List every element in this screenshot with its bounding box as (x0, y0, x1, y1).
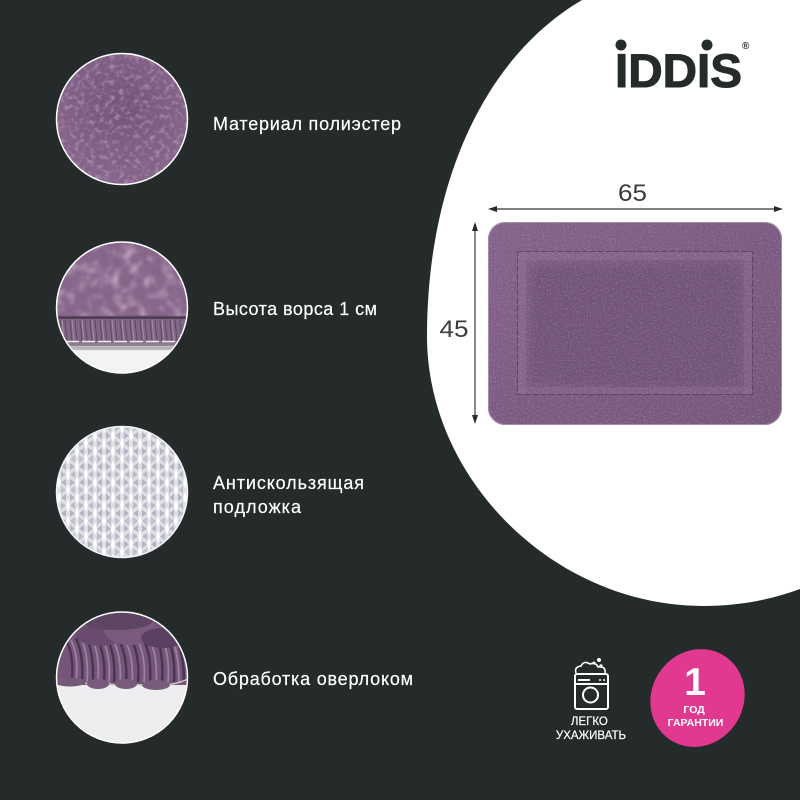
photo circle: overlock edging (54, 610, 188, 744)
warranty badge: ГОД (683, 704, 705, 716)
label: anti-slip backing: Антискользящая (213, 473, 364, 493)
logo: IDDIS: ® (742, 41, 750, 52)
photo circle: anti-slip backing (56, 426, 188, 558)
icon: washing machine (575, 658, 608, 709)
white curved panel (427, 0, 800, 606)
photo circle: pile material (56, 53, 188, 185)
logo: IDDIS: IDDIS (615, 44, 742, 97)
label: anti-slip backing (213, 473, 364, 517)
warranty badge: ГАРАНТИИ (668, 717, 723, 729)
label: overlock edging: Обработка оверлоком (213, 669, 413, 689)
dimension: height 45: 45 (440, 316, 468, 343)
dimension: width 65 (488, 180, 783, 212)
label: material: Материал полиэстер (213, 114, 401, 134)
label: pile height: Высота ворса 1 см (213, 299, 377, 319)
dimension: width 65: 65 (618, 180, 647, 207)
care label: ЛЕГКО (571, 716, 608, 728)
product: purple bath mat (488, 222, 782, 425)
warranty badge (632, 631, 763, 765)
warranty badge: 1 (684, 661, 706, 704)
label: anti-slip backing: подложка (213, 497, 302, 517)
photo circle: pile height (56, 242, 188, 374)
care label: УХАЖИВАТЬ (556, 730, 626, 742)
dimension: height 45 (440, 222, 478, 424)
